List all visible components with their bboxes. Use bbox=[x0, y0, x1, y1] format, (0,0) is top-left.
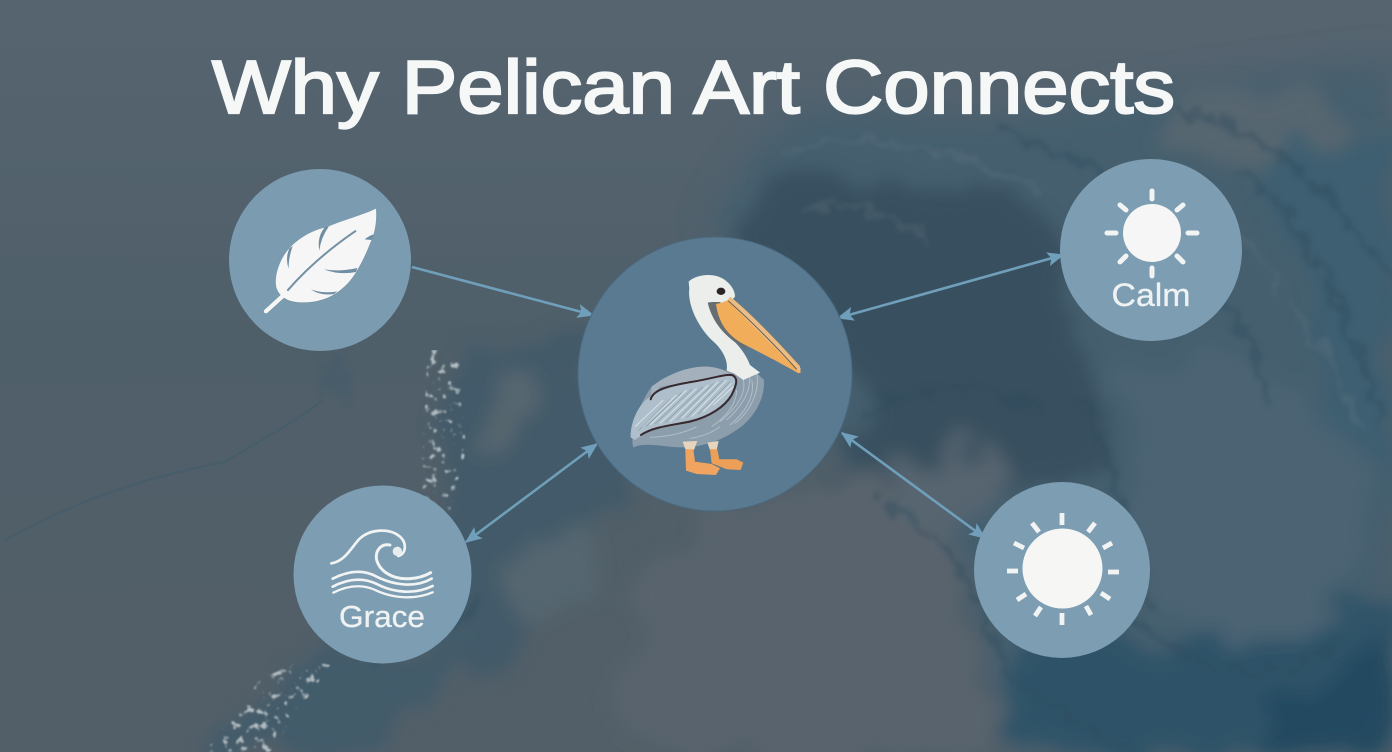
panel: calm bbox=[1060, 159, 1242, 341]
label: Calm: Calm bbox=[1112, 277, 1190, 313]
panel: feather bbox=[229, 169, 411, 351]
arrow: grace to pelican bbox=[466, 444, 597, 542]
label: Grace: Grace bbox=[339, 599, 425, 634]
arrow: calm to pelican bbox=[838, 255, 1063, 318]
panel: center pelican bbox=[578, 237, 852, 511]
arrow: feather to pelican bbox=[412, 267, 593, 315]
panel: sun bbox=[974, 482, 1150, 658]
icon: sun bbox=[1007, 513, 1119, 625]
icon: calm sun bbox=[1107, 191, 1197, 276]
icon: pelican bbox=[631, 275, 801, 475]
icon: feather bbox=[266, 209, 376, 311]
flecks along the dark strip bbox=[205, 350, 466, 752]
title: Why Pelican Art Connects bbox=[212, 45, 1175, 129]
icon: wave bbox=[331, 531, 433, 597]
arrow: sun to pelican bbox=[842, 433, 985, 538]
panel: grace bbox=[294, 486, 472, 664]
